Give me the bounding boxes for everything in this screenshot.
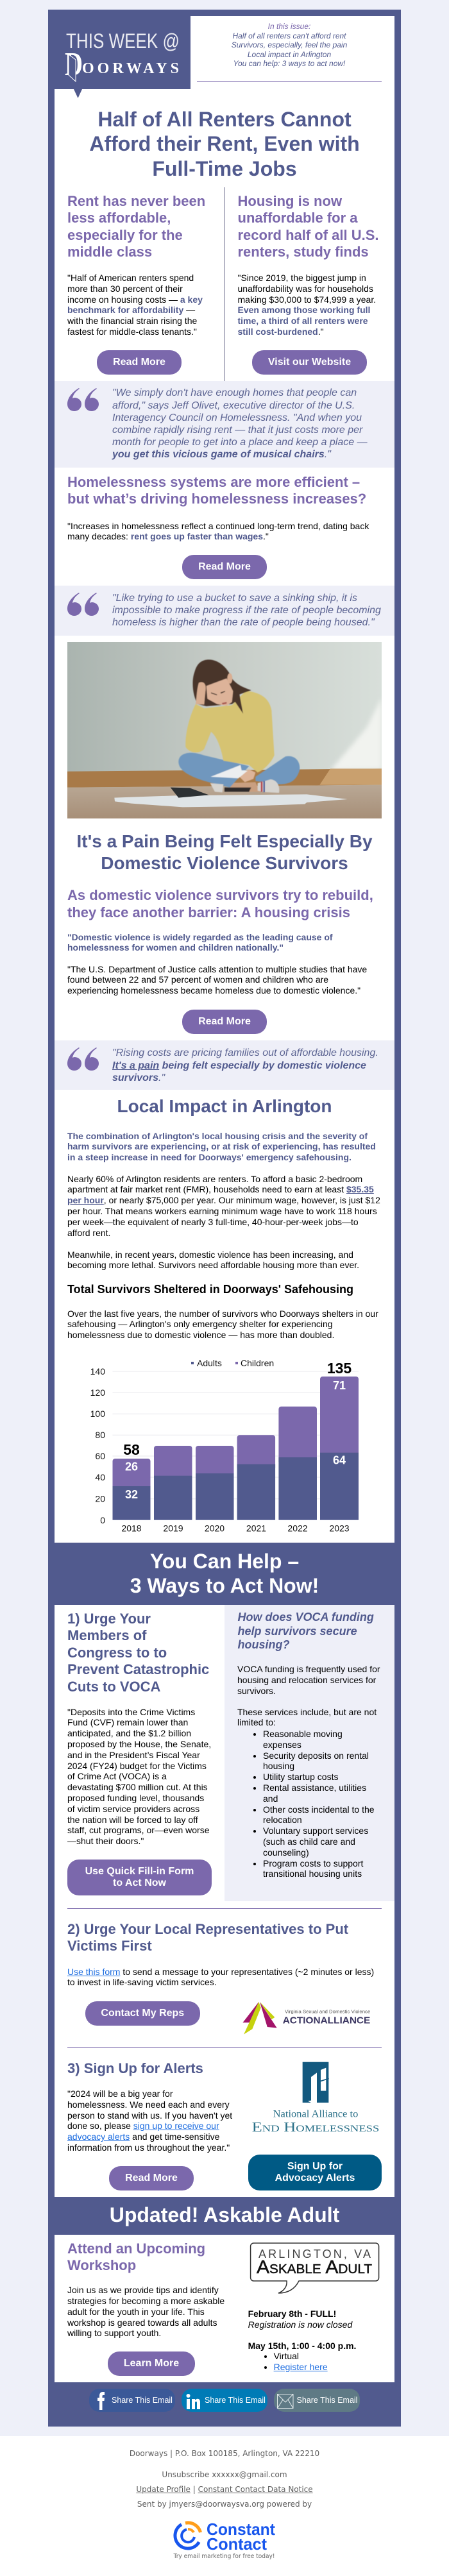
button: share by email [274,2389,360,2412]
list: eligible services: Security deposits on rental [263,1750,369,1761]
logo: askable adult speech bubble: Askable Adult [257,2257,372,2278]
text: in this issue: You can help: 3 ways to act now! [233,59,345,68]
heading: urge members of congress: Cuts to VOCA [67,1679,160,1695]
list: eligible services: Program costs to support [263,1858,363,1868]
text: quote: you get this vicious game of musical chairs." [112,449,331,460]
button: visit our website [252,350,367,375]
button: quick fill-in form [67,1860,212,1895]
heading: local representatives: 2) Urge Your Local Representatives to Put [67,1921,348,1937]
heading: sign up for alerts: 3) Sign Up for Alerts [67,2060,203,2076]
text: right article: still cost-burdened." [237,326,324,337]
text: department of justice: experiencing homelessness became homeless due to domestic violence." [67,985,360,996]
text: quote: survivors." [112,1072,165,1083]
panel: pull quote musical chairs [55,381,394,468]
text: voca funding: housing and relocation services for [237,1675,376,1685]
x axis years [121,1523,350,1534]
text: crime victims fund: and in the President’s Fiscal Year [67,1750,200,1760]
text: long-term trend: many decades: rent goes up faster than wages." [67,531,269,541]
text: crime victims fund: staff, cut programs, or—even worse [67,1825,209,1835]
logo: constant contact: Constant [207,2520,275,2539]
heading: another barrier [67,887,373,920]
text: quote [112,1047,378,1083]
text: crime victims fund: of victim service providers across [67,1804,199,1814]
text: workshop description [67,2285,224,2338]
list: eligible services: and [263,1793,278,1804]
heading: urge members of congress: Congress to to [67,1645,167,1661]
text: left article: "Half of American renters spend [67,273,194,283]
heading: pain felt by survivors: It's a Pain Being Felt Especially By [76,831,373,851]
y axis labels: 140 [90,1366,105,1377]
icon: quotation marks [67,1047,99,1071]
heading: another barrier: they face another barrier: A housing crisis [67,904,350,920]
text: workshop description: strategies for becoming a more askable [67,2296,224,2306]
button: learn more: Learn More [124,2358,179,2369]
text: leading cause: homelessness for women and children nationally." [67,942,284,953]
bar value labels: 58 [123,1441,140,1458]
heading: left article: middle class [67,244,152,260]
text: sent by: Sent by jmyers@doorwaysva.org powered by [137,2500,312,2509]
text: more than doubled [67,1309,378,1340]
legend [191,1358,274,1368]
text: in this issue: In this issue: [268,22,310,31]
x axis years: 2021 [246,1523,266,1534]
heading: urge members of congress: Prevent Catastrophic [67,1661,209,1677]
button: sign up for advocacy alerts: Advocacy Alerts [275,2173,355,2183]
text: left article: with the financial strain rising the [67,316,197,326]
heading: right article: Housing is now [237,193,342,209]
logo: action alliance: Virginia Sexual and Domestic Violence [285,2009,370,2015]
panel: action three alerts [55,2048,394,2197]
text: renters and wages: per hour, or nearly $75,000 per year. Our minimum wage, however, is just $12 [67,1195,380,1205]
text: crime victims fund: proposed funding level, thousands [67,1793,204,1803]
button: read more [97,350,182,375]
text: right article: time, a third of all renters were [237,316,368,326]
list: eligible services: transitional housing units [263,1868,362,1879]
button: sign up for advocacy alerts: Sign Up for [287,2161,343,2172]
text: big year [67,2089,232,2153]
text: combination summary: harm survivors are experiencing, or at risk of experiencing, has resulted [67,1141,376,1151]
text: services intro [237,1707,377,1727]
heading: left article: especially for the [67,227,183,243]
list: eligible services [253,1729,375,1879]
heading: how does voca help: How does VOCA funding [237,1611,374,1623]
panel: how voca helps [224,1605,394,1901]
x axis years: 2022 [287,1523,308,1534]
heading band: you can help: You Can Help – [150,1550,299,1573]
text: quote: homeless is higher than the rate of people being housed." [112,617,375,628]
logo: this week at doorways: OORWAYS [82,60,179,77]
logo: this week at doorways [55,16,191,98]
text: crime victims fund: of Crime Act (VOCA) is a [67,1771,167,1781]
text: workshop dates: May 15th, 1:00 - 4:00 p.m. [248,2341,356,2351]
text: long-term trend [67,521,369,541]
text: services intro: limited to: [237,1717,276,1727]
text: crime victims fund: —shut their doors." [67,1836,144,1846]
heading: half of all renters [89,108,360,180]
panel: action two representatives [55,1918,394,2048]
list: workshop details: Register here [274,2362,328,2372]
text: unsubscribe: Unsubscribe xxxxxx@gmail.com [162,2470,287,2479]
heading: left article [67,193,205,260]
text: department of justice [67,964,367,996]
text: crime victims fund: 2024 (FY24) budget for the Victims [67,1761,207,1771]
text: renters and wages: per week—the equivalent of nearly 3 full-time, 40-hour-per-week jobs—to [67,1217,359,1227]
text: more than doubled: safehousing — Arlington's only emergency shelter for experiencing [67,1319,333,1329]
button: quick fill-in form: to Act Now [113,1877,166,1888]
text: leading cause [67,932,333,953]
text: in this issue: Local impact in Arlington [248,50,331,59]
heading: homelessness systems: but what’s driving homelessness increases? [67,491,366,507]
text: right article: "Since 2019, the biggest jump in [237,273,366,283]
panel: outer newsletter frame [48,10,401,2427]
text: left article: benchmark for affordability — [67,305,195,315]
y axis labels: 20 [95,1493,105,1504]
bar value labels: 71 [333,1379,346,1392]
heading: half of all renters: Full-Time Jobs [152,157,297,180]
text: workshop description: adult for the youth in your life. This [67,2307,205,2317]
list: eligible services: (such as child care and [263,1836,355,1847]
text: in this issue: Survivors, especially, feel the pain [232,40,347,49]
panel: askable adult workshop [55,2235,394,2382]
panel: lead story on renters [55,16,394,381]
heading: urge members of congress: 1) Urge Your [67,1611,151,1627]
button: share by email: Share This Email [296,2396,357,2405]
heading: local representatives: Victims First [67,1938,152,1954]
heading: how does voca help [237,1611,374,1651]
text: workshop dates: February 8th - FULL! [248,2309,336,2319]
text: big year: done so, please sign up to receive our [67,2121,219,2131]
y axis labels: 120 [90,1387,105,1398]
band: share buttons [48,2382,401,2427]
list: eligible services: Voluntary support services [263,1826,368,1836]
text: quote: "We simply don't have enough homes that people can [112,387,357,398]
text: update profile: Update Profile | Constant Contact Data Notice [136,2485,313,2494]
button: learn more [108,2351,195,2376]
text: big year: advocacy alerts and get time-sensitive [67,2131,219,2142]
text: quote: afford," says Jeff Olivet, executive director of the U.S. [112,400,355,411]
text: quote [112,387,368,460]
button: share on linkedin: Share This Email [205,2396,266,2405]
bar value labels [123,1360,352,1501]
text: renters and wages: per hour. That means workers earning minimum wage have to work 118 hours [67,1206,377,1216]
heading: homelessness systems: Homelessness systems are more efficient – [67,473,360,490]
text: use this form: Use this form to send a message to your representatives (~2 minutes or less) [67,1967,374,1977]
heading band: you can help [48,1543,401,1605]
text: more than doubled: Over the last five years, the number of survivors who Doorways shelters in our [67,1309,378,1319]
text: crime victims fund: "Deposits into the Crime Victims [67,1707,195,1717]
x axis years: 2023 [329,1523,350,1534]
chart: survivors sheltered by year [90,1358,359,1534]
heading: urge members of congress [67,1611,209,1695]
text: combination summary [67,1130,376,1162]
text: crime victims fund: anticipated, and the $1.2 billion [67,1728,191,1738]
panel: local impact in arlington [55,1090,394,1543]
button: share on facebook: Share This Email [112,2396,173,2405]
legend: Children [241,1358,274,1368]
text: quote: combine rapidly rising rent — that it just costs more per [112,425,362,436]
logo: national alliance to end homelessness: National Alliance to [273,2108,359,2119]
text: crime victims fund: devastating $700 million cut. At this [67,1782,208,1792]
text: violence increasing: becoming more lethal. Survivors need affordable housing more than ever. [67,1260,359,1270]
heading: right article: renters, study finds [237,244,369,260]
text: big year: "2024 will be a big year for [67,2089,173,2099]
heading: attend a workshop [67,2241,205,2273]
text: long-term trend: "Increases in homelessness reflect a continued long-term trend, dating back [67,521,369,531]
logo: constant contact: Contact [207,2534,267,2554]
heading band: you can help: 3 Ways to Act Now! [130,1574,319,1597]
text: left article [67,273,203,337]
logo: national alliance to end homelessness [252,2062,379,2135]
heading: right article [237,193,379,260]
y axis labels: 80 [95,1430,105,1440]
text: voca funding: VOCA funding is frequently used for [237,1664,380,1674]
text: in this issue: Half of all renters can't afford rent [232,31,346,40]
button: visit our website: Visit our Website [268,357,351,368]
text: voca funding [237,1664,380,1696]
text: right article: making $30,000 to $74,999 a year. [237,294,376,305]
text: left article: more than 30 percent of their [67,284,183,294]
text: combination summary: The combination of Arlington's local housing crisis and the severity of [67,1130,368,1140]
logo: askable adult speech bubble [250,2242,380,2294]
text: use this form: to invest in life-saving victim services. [67,1977,217,1987]
x axis years: 2018 [121,1523,142,1534]
heading: right article: unaffordable for a [237,210,358,226]
text: quote [112,593,381,628]
text: crime victims fund: the nation will be forced to lay off [67,1815,198,1825]
text: quote: "Rising costs are pricing families out of affordable housing. [112,1047,378,1058]
text: more than doubled: homelessness due to domestic violence — has more than doubled. [67,1330,334,1340]
heading: pain felt by survivors [76,831,373,873]
panel: domestic violence survivors [55,636,394,1040]
text: workshop dates: Registration is now closed [248,2319,352,2330]
text: in this issue [232,22,347,68]
text: department of justice: "The U.S. Department of Justice calls attention to multiple studies that have [67,964,367,974]
bar value labels: 135 [327,1360,352,1377]
heading: right article: record half of all U.S. [237,227,379,243]
text: workshop dates [248,2309,356,2351]
heading: how does voca help: help survivors secure [237,1625,357,1638]
button: share on linkedin [182,2389,267,2412]
icon: quotation marks [67,388,99,411]
text: quote: It's a pain being felt especially by domestic violence [112,1060,366,1071]
bar value labels: 26 [125,1460,138,1473]
text: crime victims fund: Fund (CVF) remain lower than [67,1717,188,1727]
text: quote: Interagency Council on Homelessness. "And when you [112,412,362,423]
text: left article: fastest for middle-class tenants." [67,326,197,337]
heading: half of all renters: Half of All Renters Cannot [97,108,352,131]
heading: left article: less affordable, [67,210,171,226]
logo: this week at doorways: D [65,46,83,83]
y axis labels: 40 [95,1472,105,1482]
heading band: updated askable adult: Updated! Askable Adult [110,2203,339,2226]
text: voca funding: survivors. [237,1686,276,1696]
heading: homelessness systems [67,473,366,507]
text: workshop description: willing to support youth. [67,2328,161,2338]
button: read more: Read More [198,1016,251,1027]
text: renters and wages: Nearly 60% of Arlington residents are renters. To afford a basic 2-bedroom [67,1174,362,1184]
panel: pull quote sinking ship [55,586,394,636]
text: big year: homelessness. We need each and every [67,2099,230,2110]
bar value labels: 64 [333,1454,346,1467]
y axis labels: 60 [95,1451,105,1461]
text: quote: "Like trying to use a bucket to save a sinking ship, it is [112,593,357,604]
y axis labels: 100 [90,1409,105,1419]
text: right article [237,273,376,337]
button: contact my reps: Contact My Reps [101,2008,184,2019]
y axis labels: 0 [100,1515,105,1525]
heading: total survivors: Total Survivors Sheltered in Doorways' Safehousing [67,1283,353,1296]
text: leading cause: "Domestic violence is widely regarded as the leading cause of [67,932,333,942]
list: eligible services: Utility startup costs [263,1772,338,1782]
button: read more [182,555,267,579]
logo: action alliance [242,2002,371,2035]
button: share on facebook [89,2389,175,2412]
text: violence increasing [67,1250,359,1270]
panel: pull quote rising costs [55,1040,394,1090]
button: read more [182,1010,267,1034]
text: crime victims fund [67,1707,211,1846]
x axis years: 2020 [205,1523,224,1534]
button: read more [109,2166,194,2190]
heading: local representatives [67,1921,348,1954]
heading: urge members of congress: Members of [67,1627,146,1643]
list: eligible services: Rental assistance, utilities [263,1783,366,1793]
panel: homelessness systems article [55,468,394,586]
heading: left article: Rent has never been [67,193,205,209]
list: eligible services: housing [263,1761,294,1771]
text: workshop description: workshop is geared towards all adults [67,2318,217,2328]
text: crime victims fund: proposed by the House, the Senate, [67,1739,211,1749]
text: use this form [67,1967,374,1987]
text: renters and wages: afford rent. [67,1228,110,1238]
button: read more: Read More [198,561,251,572]
list: workshop details [248,2351,328,2373]
text: services intro: These services include, but are not [237,1707,377,1717]
logo: constant contact [167,2516,282,2561]
list: eligible services: relocation [263,1815,302,1825]
list: eligible services: expenses [263,1740,301,1750]
text: combination summary: in a steep increase in need for Doorways' emergency safehousing. [67,1152,352,1162]
text: department of justice: found between 22 and 57 percent of women and children who are [67,974,328,985]
photo: woman on floor with bills [67,642,382,818]
text: violence increasing: Meanwhile, in recent years, domestic violence has been increasing, and [67,1250,353,1260]
heading: local impact: Local Impact in Arlington [117,1096,332,1116]
heading band: updated askable adult [48,2197,401,2235]
logo: action alliance: ACTIONALLIANCE [283,2015,371,2026]
footer [0,2436,449,2576]
text: right article: unaffordability was for households [237,284,373,294]
text: right article: Even among those working full [237,305,370,315]
x axis years: 2019 [163,1523,183,1534]
text: quote: month for people to get into a place and keep a place — [112,437,368,448]
logo: national alliance to end homelessness: End Homelessness [252,2119,379,2135]
list: eligible services: Reasonable moving [263,1729,343,1739]
heading: attend a workshop: Attend an Upcoming [67,2241,205,2257]
text: big year: information from us throughout the year." [67,2142,230,2153]
logo: askable adult speech bubble: ARLINGTON, VA [258,2248,371,2260]
button: sign up for advocacy alerts [248,2155,382,2190]
button: quick fill-in form: Use Quick Fill-in Form [85,1866,194,1877]
text: big year: person to stand with us. If you haven't yet [67,2110,232,2121]
list: eligible services: counseling) [263,1847,309,1858]
button: read more: Read More [113,357,165,368]
panel: action one voca [55,1605,394,1918]
heading: another barrier: As domestic violence survivors try to rebuild, [67,887,373,903]
heading: how does voca help: housing? [237,1638,289,1651]
heading: half of all renters: Afford their Rent, Even with [89,132,360,155]
text: address: Doorways | P.O. Box 100185, Arlington, VA 22210 [130,2449,319,2458]
text: renters and wages [67,1174,380,1238]
button: contact my reps [85,2001,200,2026]
text: quote: impossible to make progress if the rate of people becoming [112,605,381,616]
text: workshop description: Join us as we provide tips and identify [67,2285,219,2295]
button: read more: Read More [125,2173,178,2183]
bar value labels: 32 [125,1488,138,1501]
y axis labels [90,1366,105,1525]
icon: quotation marks [67,593,99,616]
text: renters and wages: apartment at fair market rent (FMR), households need to earn at least $35.35 [67,1184,374,1194]
legend: Adults [197,1358,222,1368]
text: left article: income on housing costs — a key [67,294,203,305]
heading: attend a workshop: Workshop [67,2257,136,2273]
list: eligible services: Other costs incidental to the [263,1804,375,1815]
list: workshop details: Virtual [274,2351,299,2361]
heading: pain felt by survivors: Domestic Violence Survivors [101,853,348,873]
bars [113,1377,359,1520]
